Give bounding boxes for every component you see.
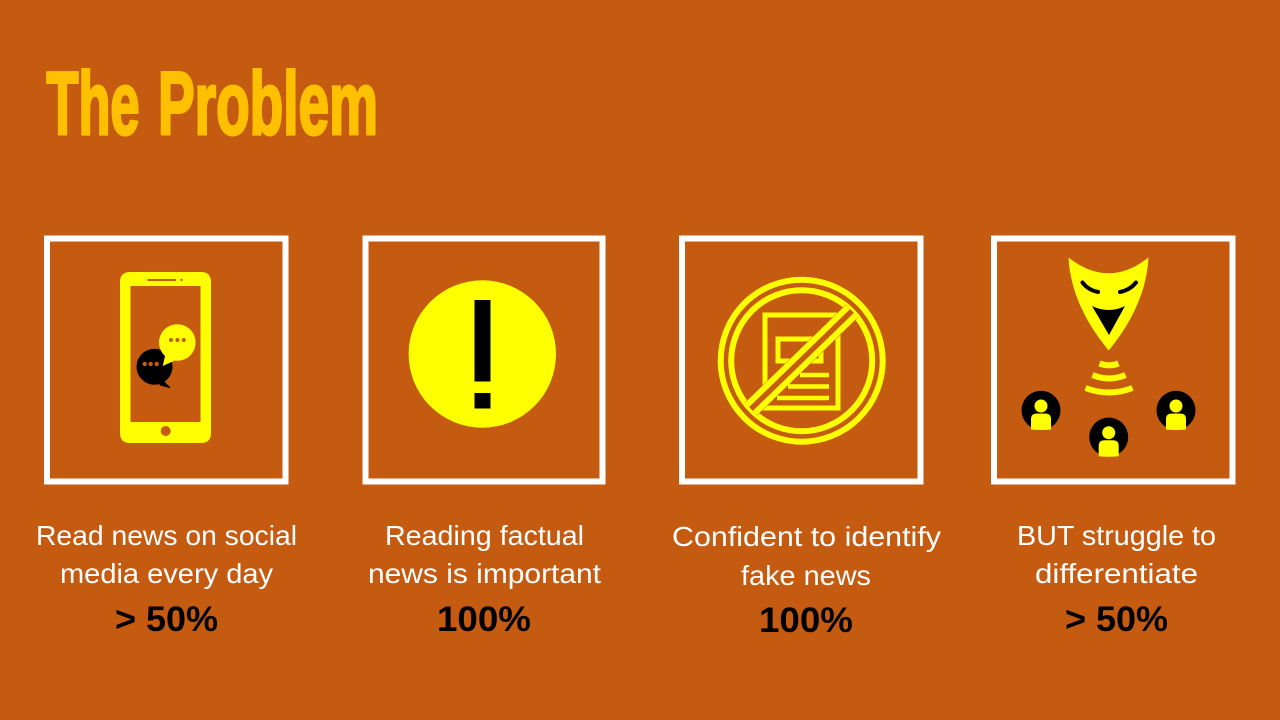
- icon: phone with chat bubbles: [120, 272, 211, 443]
- panel: struggle to differentiate: [994, 238, 1232, 639]
- icon: deceptive mask broadcasting to people: [1022, 258, 1196, 457]
- panel: social media news: [36, 238, 297, 639]
- panel: factual news: [366, 238, 602, 639]
- caption: but struggle to differentiate: [1017, 520, 1216, 589]
- caption: factual news is important: [368, 520, 601, 589]
- statistic: over 50 percent: > 50%: [115, 600, 218, 639]
- caption: but struggle to differentiate: differentiate: [1035, 558, 1198, 589]
- caption: factual news is important: Reading factual: [385, 520, 584, 551]
- title: The: [46, 53, 140, 153]
- icon: prohibited newspaper: [721, 280, 883, 442]
- caption: read news on social media: Read news on social: [36, 520, 297, 551]
- caption: confident to identify fake news: Confident to identify: [672, 521, 941, 552]
- caption: factual news is important: news is important: [368, 558, 601, 589]
- panel: confident to identify: [672, 238, 941, 640]
- title: [46, 53, 378, 153]
- title: Problem: [158, 53, 378, 153]
- statistic: over 50 percent: > 50%: [1065, 600, 1168, 639]
- statistic: 100 percent: 100%: [759, 601, 853, 640]
- caption: read news on social media: media every day: [60, 558, 273, 589]
- caption: confident to identify fake news: [672, 521, 941, 591]
- icon: exclamation mark: [409, 280, 556, 428]
- statistic: 100 percent: 100%: [437, 600, 531, 639]
- caption: read news on social media: [36, 520, 297, 589]
- caption: but struggle to differentiate: BUT struggle to: [1017, 520, 1216, 551]
- caption: confident to identify fake news: fake news: [741, 560, 871, 591]
